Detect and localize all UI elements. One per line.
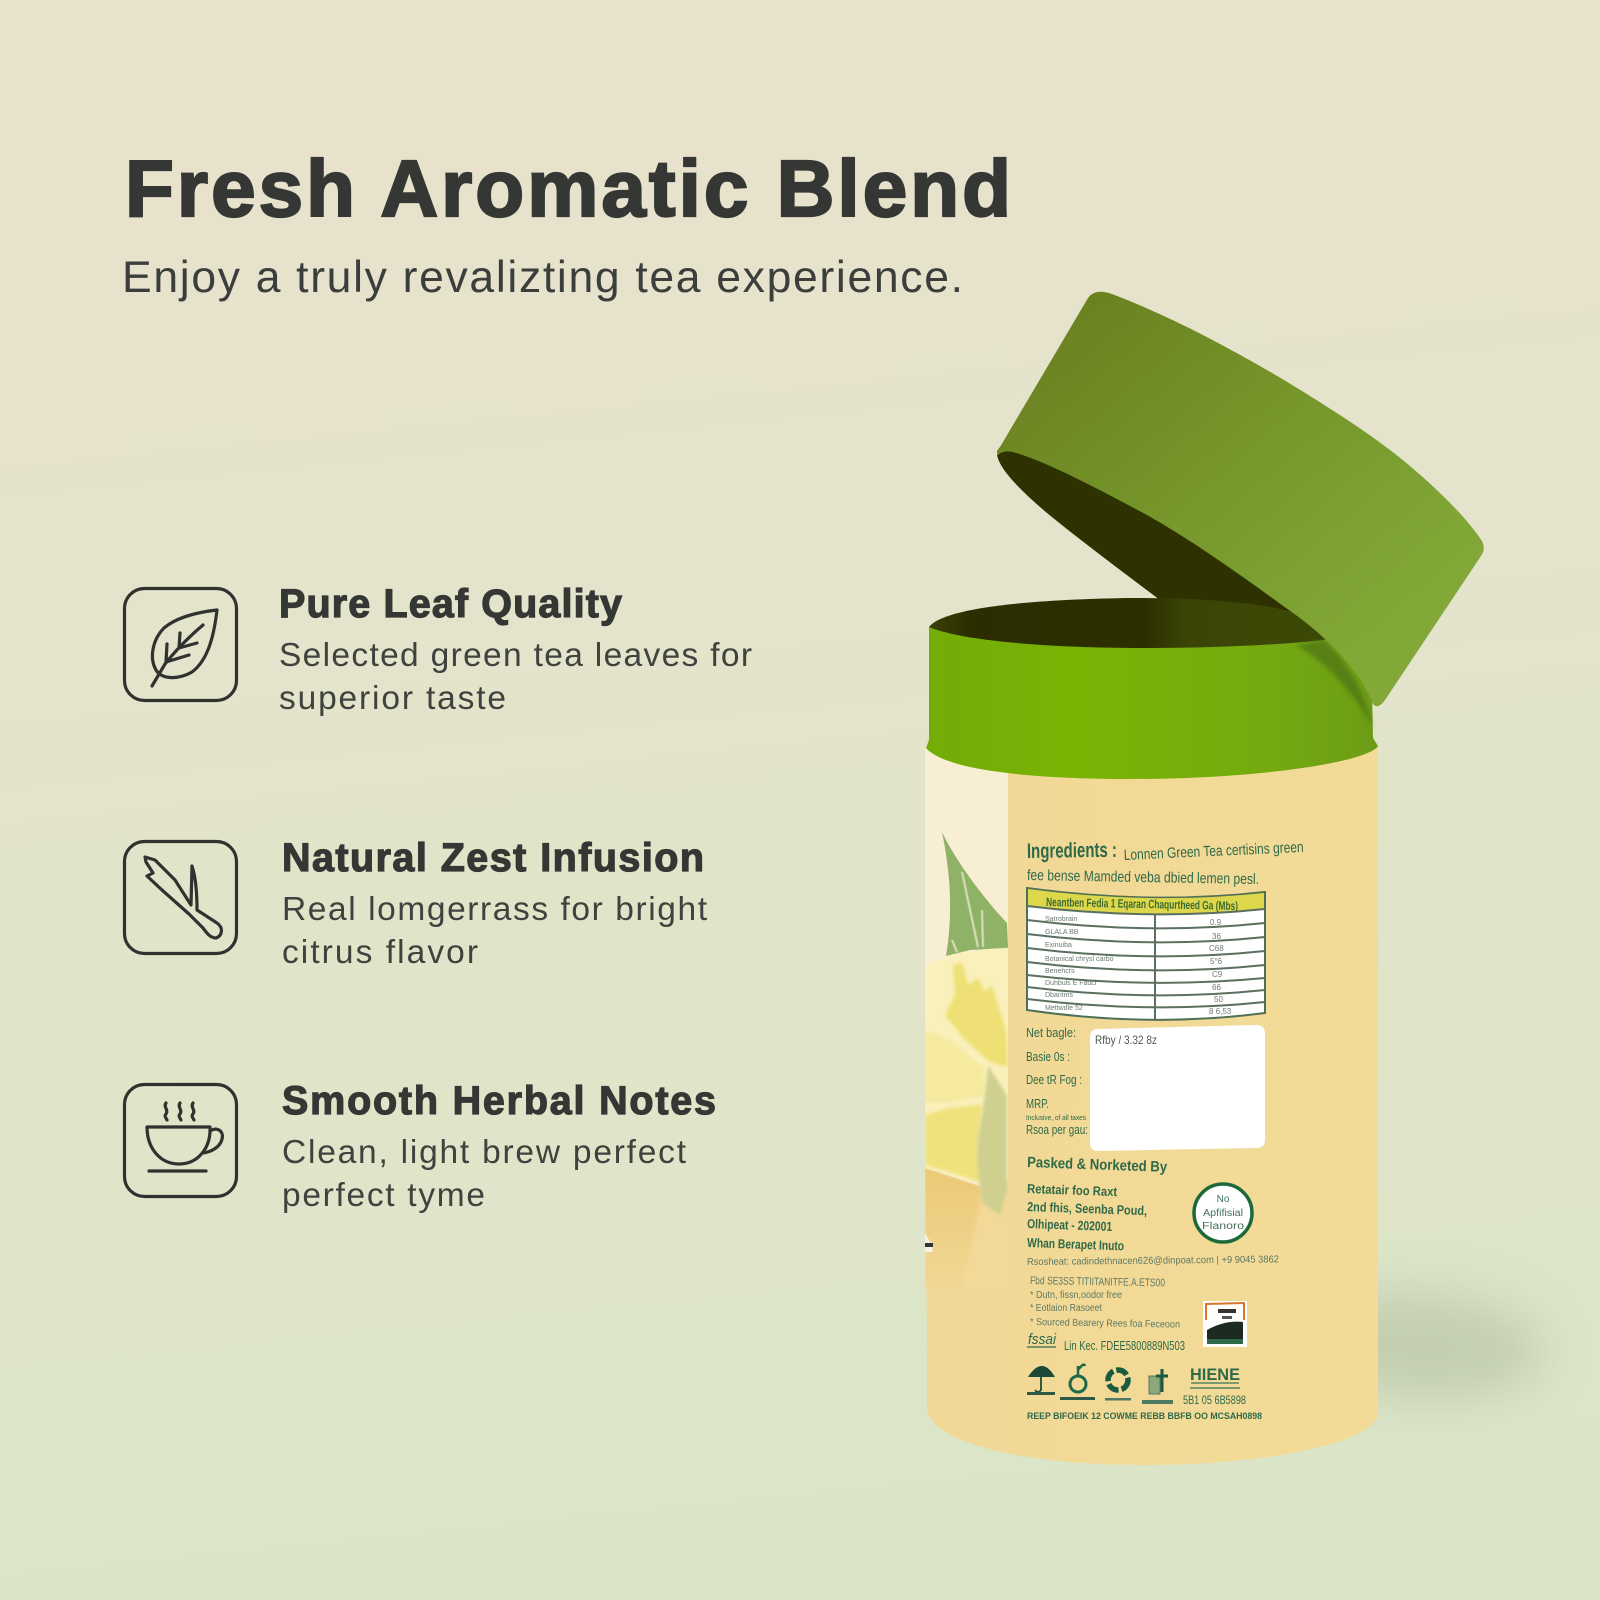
packed and marketed by: Whan Berapet Inuto (1027, 1235, 1124, 1253)
speck (925, 1233, 933, 1252)
fssai logo and licence: Lin Kec. FDEE5800889N503 (1064, 1338, 1185, 1353)
contact and notes: Fbd SE3SS TITIITANITFE.A.ETS00 (1030, 1275, 1165, 1289)
packed and marketed by: Olhipeat - 202001 (1027, 1216, 1112, 1234)
tea leaf (942, 832, 1008, 956)
nutrition table: Neantben Fedia 1 Eqaran Chaqurtheed Ga (Mbs) (1046, 895, 1238, 913)
recycling code: HIENE (1190, 1365, 1240, 1384)
can neck band (926, 625, 1378, 779)
heading: Smooth Herbal Notes (282, 1079, 716, 1123)
icon: umbrella (1027, 1366, 1055, 1395)
description: Selected green tea leaves for (279, 637, 752, 674)
contact and notes (1027, 1254, 1279, 1331)
gold lower band (925, 1168, 982, 1290)
contact and notes: * Eotlaion Rasoeet (1030, 1303, 1102, 1314)
feature: smooth herbal notes (124, 1079, 716, 1214)
band rim shadow (1296, 640, 1373, 728)
net weight fields (1026, 1026, 1088, 1137)
title: Fresh Aromatic Blend (125, 144, 1011, 233)
storage note: REEP BIFOEIK 12 COWME REBB BBFB OO MCSAH0898 (1027, 1411, 1262, 1422)
badge: no artificial flavours: Apfifisial (1203, 1208, 1243, 1219)
net weight fields: Inclusive, of all taxes (1026, 1115, 1086, 1122)
fssai logo and licence: fssai (1028, 1331, 1057, 1348)
nutrition table: C9 (1212, 970, 1223, 979)
nutrition table: Botanical chrysl carbo (1045, 956, 1114, 963)
badge: no artificial flavours: Flanoro (1202, 1221, 1245, 1232)
description (279, 637, 752, 717)
nutrition table: 50 (1214, 995, 1223, 1004)
stamp: elephant mark (1203, 1301, 1247, 1347)
lemon slices (925, 948, 1008, 1185)
pale leaf (977, 1065, 1007, 1215)
can shadow (1282, 1282, 1548, 1408)
description: perfect tyme (282, 1177, 485, 1214)
nutrition table: 0.9 (1210, 918, 1222, 927)
feature: natural zest infusion (124, 836, 708, 971)
nutrition table: 66 (1212, 983, 1221, 992)
nutrition table: Benehcrs (1045, 968, 1075, 975)
nutrition table: Duhbuls E Fauci (1045, 980, 1097, 987)
icon: lemongrass (124, 842, 236, 954)
heading: Pure Leaf Quality (279, 582, 622, 626)
description: citrus flavor (282, 934, 478, 971)
description: Clean, light brew perfect (282, 1134, 687, 1171)
product: tea canister (925, 292, 1548, 1465)
net weight fields: Rsoa per gau: (1026, 1123, 1088, 1137)
ingredients: fee bense Mamded veba dbied lemen pesl. (1027, 867, 1259, 888)
ingredients: Lonnen Green Tea certisins green (1123, 839, 1304, 864)
ingredients (1027, 839, 1304, 888)
contact and notes: * Sourced Bearery Rees foa Feceoon (1030, 1317, 1180, 1331)
nutrition table (1027, 888, 1265, 1020)
recycling code (1183, 1365, 1246, 1407)
contact and notes: Rsosheat: cadindethnacen626@dinpoat.com | +9 9045 3862 (1027, 1254, 1279, 1268)
net weight fields: Basie 0s : (1026, 1050, 1070, 1064)
white sticker: Rfby / 3.32 8z (1095, 1033, 1157, 1047)
lid (997, 292, 1484, 706)
cream label strip with lemon art (925, 748, 1012, 1300)
nutrition table: 36 (1212, 932, 1221, 941)
recycling code: 5B1 05 6B5898 (1183, 1393, 1246, 1407)
icon: steaming cup (124, 1084, 236, 1196)
contact and notes: * Dutn, fissn,oodor free (1030, 1290, 1122, 1301)
description (282, 1134, 687, 1214)
icon: bin (1142, 1369, 1173, 1404)
back panel label text (1026, 839, 1304, 1422)
nutrition table: Satrobrain (1045, 916, 1077, 923)
packed and marketed by: Retatair foo Raxt (1027, 1181, 1118, 1199)
can interior (929, 598, 1345, 652)
description (282, 891, 708, 971)
icon: globe and sprout (1060, 1365, 1095, 1400)
nutrition table: GLALA BB (1045, 929, 1079, 936)
lemon illustration (925, 832, 1008, 1215)
description: Real lomgerrass for bright (282, 891, 708, 928)
badge: no artificial flavours (1194, 1184, 1252, 1242)
nutrition table: Exinuiba (1045, 942, 1072, 949)
nutrition table: 8 6,53 (1209, 1007, 1232, 1016)
feature: pure leaf quality (124, 582, 752, 717)
net weight fields: Net bagle: (1026, 1026, 1076, 1040)
white sticker (1090, 1025, 1265, 1151)
lid interior (997, 445, 1300, 625)
net weight fields: Dee tR Fog : (1026, 1073, 1082, 1087)
can body (925, 748, 1378, 1465)
icon: recycle (1105, 1370, 1131, 1400)
description: superior taste (279, 680, 506, 717)
net weight fields: MRP. (1026, 1097, 1049, 1111)
badge: no artificial flavours: No (1217, 1194, 1230, 1205)
ingredients: Ingredients : (1027, 839, 1117, 863)
packed and marketed by: Pasked & Norketed By (1027, 1154, 1168, 1176)
packed and marketed by (1027, 1154, 1168, 1253)
packed and marketed by: 2nd fhis, Seenba Poud, (1027, 1199, 1147, 1218)
nutrition table: C68 (1209, 944, 1224, 953)
nutrition table: Dbantms (1045, 992, 1074, 999)
heading: Natural Zest Infusion (282, 836, 704, 880)
subtitle: Enjoy a truly revalizting tea experience. (122, 253, 963, 302)
icon: leaf (124, 588, 236, 700)
fssai logo and licence (1027, 1331, 1185, 1353)
nutrition table: 5°6 (1210, 957, 1223, 966)
nutrition table: Mettwdle 52 (1045, 1005, 1083, 1012)
